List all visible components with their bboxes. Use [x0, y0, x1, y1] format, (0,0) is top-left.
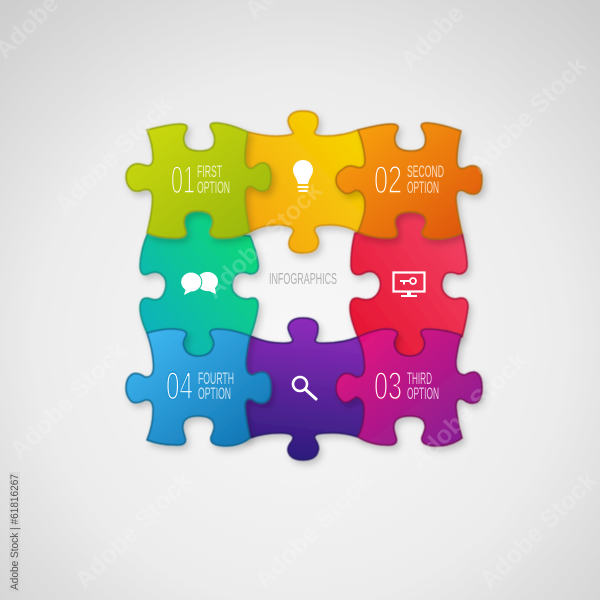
text: third option: THIRD	[407, 370, 432, 388]
stock watermarks: Adobe Stock	[69, 466, 197, 594]
piece: red right	[350, 205, 468, 360]
stock watermarks: Adobe Stock	[249, 466, 377, 594]
text: second option: SECOND	[407, 163, 444, 181]
piece: fourth option blue	[126, 329, 271, 446]
stock watermarks: Adobe Stock	[4, 336, 132, 464]
text: third option	[374, 365, 439, 408]
center title: INFOGRAPHICS	[269, 271, 337, 288]
side credit: Adobe Stock | #61816267	[9, 474, 21, 590]
stock watermarks: Adobe Stock	[404, 346, 532, 474]
stock watermarks: Adobe Stock	[464, 51, 592, 179]
piece: teal left	[140, 208, 258, 360]
stock watermarks: Adobe Stock	[474, 466, 600, 594]
icon: light bulb	[293, 160, 313, 192]
icon: chat bubbles	[181, 272, 218, 296]
text: first option: 01	[171, 159, 195, 202]
piece: third option magenta	[336, 329, 482, 446]
text: third option: OPTION	[407, 385, 439, 403]
text: second option: OPTION	[407, 179, 439, 197]
piece: yellow top	[240, 111, 365, 253]
text: first option: FIRST	[197, 163, 222, 181]
text: second option	[374, 159, 444, 202]
text: fourth option: 04	[166, 365, 193, 408]
text: second option: 02	[374, 159, 402, 202]
text: third option: 03	[374, 365, 402, 408]
stock watermarks: Adobe Stock	[49, 91, 177, 219]
text: first option: OPTION	[197, 179, 230, 197]
puzzle ring	[126, 111, 482, 460]
text: fourth option	[166, 365, 234, 408]
piece: first option green	[126, 123, 271, 238]
icon: monitor with key	[394, 272, 424, 297]
piece: second option orange	[336, 123, 482, 239]
stock watermarks: Adobe Stock	[199, 176, 327, 304]
text: fourth option: OPTION	[198, 385, 231, 403]
text: fourth option: FOURTH	[198, 370, 234, 388]
stock watermarks: Adobe	[394, 0, 469, 74]
icon: magnifier	[293, 377, 316, 399]
piece: purple bottom	[240, 318, 365, 460]
